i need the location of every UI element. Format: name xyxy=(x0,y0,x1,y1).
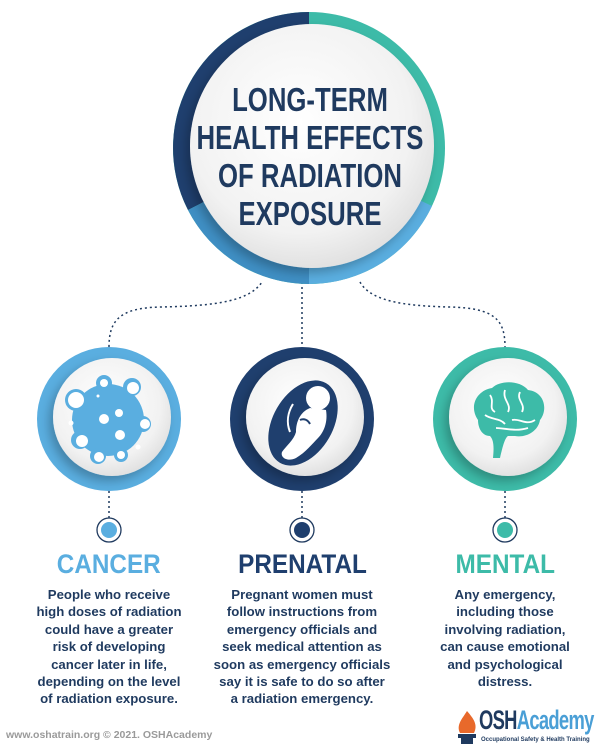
title xyxy=(197,81,423,232)
text: cancer: could have a greater xyxy=(45,622,173,637)
title: HEALTH EFFECTS xyxy=(197,119,423,156)
text: cancer: high doses of radiation xyxy=(36,604,182,619)
text: mental xyxy=(440,587,570,689)
main title circle xyxy=(173,12,445,284)
text: prenatal xyxy=(214,587,390,706)
text: cancer: People who receive xyxy=(48,587,170,602)
text: mental: involving radiation, xyxy=(445,622,565,637)
title: OF RADIATION xyxy=(218,157,402,194)
icon: cancer cell xyxy=(65,375,151,464)
text: mental: Any emergency, xyxy=(455,587,555,602)
title: EXPOSURE xyxy=(238,195,382,232)
logo: OSHAcademy xyxy=(479,705,594,735)
footer credit: www.oshatrain.org © 2021. OSHAcademy xyxy=(6,729,212,741)
text: prenatal: a radiation emergency. xyxy=(231,691,373,706)
connectors xyxy=(109,282,505,518)
heading: prenatal: PRENATAL xyxy=(238,549,366,579)
text: cancer: cancer later in life, xyxy=(51,657,167,672)
text: mental: distress. xyxy=(478,674,532,689)
logo xyxy=(458,705,594,744)
text: prenatal: follow instructions from xyxy=(227,604,377,619)
text: prenatal: emergency officials and xyxy=(227,622,377,637)
text: mental: and psychological xyxy=(447,657,563,672)
mental circle xyxy=(433,347,577,491)
text: prenatal: say it is safe to do so after xyxy=(219,674,385,689)
icon: fetus xyxy=(254,368,352,478)
text: mental: can cause emotional xyxy=(440,639,570,654)
text: cancer xyxy=(36,587,182,706)
marker dots xyxy=(97,518,517,542)
prenatal circle xyxy=(230,347,374,491)
text: prenatal: soon as emergency officials xyxy=(214,657,390,672)
heading: cancer: CANCER xyxy=(57,549,161,579)
text: cancer: risk of developing xyxy=(53,639,165,654)
cancer circle xyxy=(37,347,181,491)
text: cancer: of radiation exposure. xyxy=(40,691,178,706)
heading: mental: MENTAL xyxy=(455,549,555,579)
title: LONG-TERM xyxy=(232,81,388,118)
text: mental: including those xyxy=(456,604,554,619)
text: cancer: depending on the level xyxy=(38,674,180,689)
icon: brain xyxy=(474,382,544,458)
logo: Occupational Safety & Health Training xyxy=(481,737,590,743)
text: prenatal: seek medical attention as xyxy=(222,639,382,654)
text: prenatal: Pregnant women must xyxy=(231,587,373,602)
